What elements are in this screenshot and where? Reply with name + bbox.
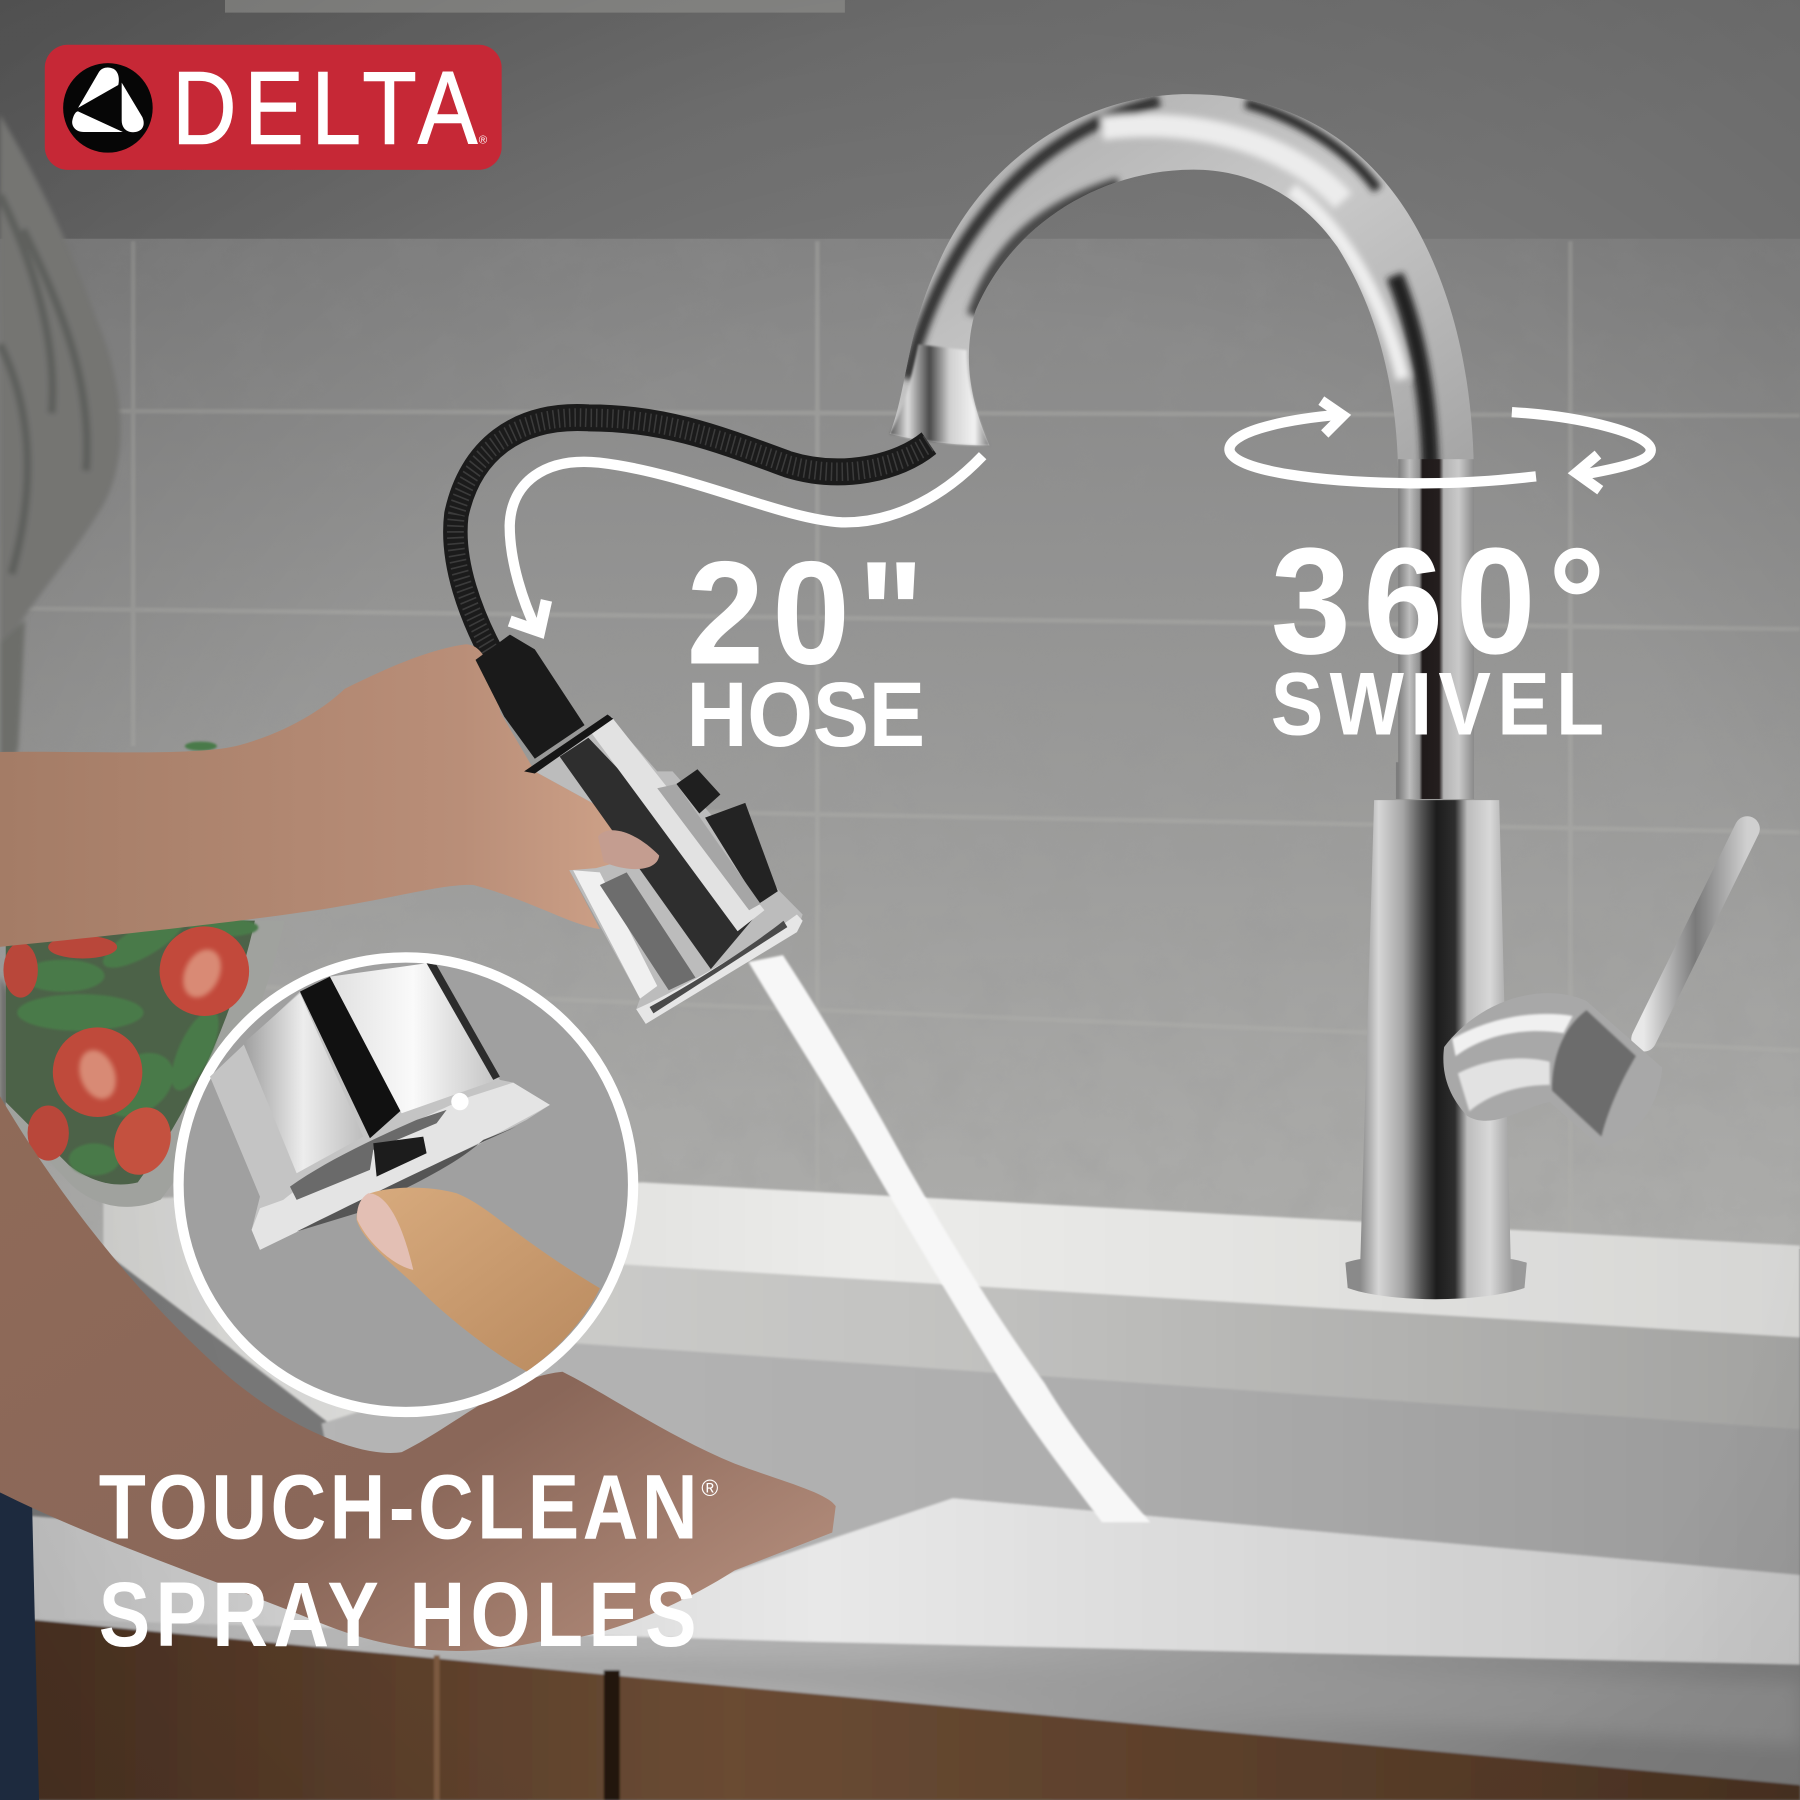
text: 20 inch hose xyxy=(686,531,925,766)
spray face xyxy=(297,1127,517,1232)
sprayer body xyxy=(524,715,803,1024)
strawberries xyxy=(3,926,249,1183)
salad bowl xyxy=(3,742,285,1207)
spout gooseneck xyxy=(890,94,1474,482)
woman's sweater xyxy=(0,115,121,1108)
bowl glass xyxy=(6,918,285,1207)
sink basin xyxy=(321,1343,1800,1575)
handle lever xyxy=(1644,829,1747,1039)
sprayer rim xyxy=(636,914,803,1024)
Delta logo xyxy=(45,45,502,170)
resting forearm and hand xyxy=(0,1096,836,1651)
chrome dark band xyxy=(300,977,402,1138)
text: touch-clean spray holes xyxy=(99,1455,718,1666)
registered mark: ® xyxy=(479,134,488,146)
sprayer closeup cone xyxy=(210,963,550,1250)
kitchen counter and sink xyxy=(21,1182,1800,1800)
fingernail xyxy=(598,830,659,869)
pull-down hose and sprayer with hand xyxy=(0,418,929,1024)
spout vertical leg xyxy=(1398,459,1474,769)
handle hub xyxy=(1443,993,1662,1148)
faucet body xyxy=(1360,800,1511,1260)
front counter edge xyxy=(23,1607,1800,1791)
leaves xyxy=(17,742,258,1176)
handle reflections xyxy=(1452,1010,1636,1136)
sprayer top ring xyxy=(524,715,613,773)
chrome light band xyxy=(244,994,344,1174)
text: 20 inch hose: 20" xyxy=(686,531,924,695)
chrome white band xyxy=(330,963,497,1113)
water stream xyxy=(748,955,1150,1522)
fingernail xyxy=(357,1193,413,1270)
highlight glint xyxy=(451,1093,469,1110)
counter back ledge xyxy=(103,1182,1800,1435)
soft shading where the counter turns down xyxy=(344,1653,1800,1745)
finger xyxy=(357,1188,600,1372)
logo emblem xyxy=(63,63,153,153)
background: tile wall xyxy=(0,239,1800,1249)
hose connector xyxy=(476,635,585,759)
spout reflections xyxy=(907,101,1430,482)
collar xyxy=(1396,762,1474,799)
counter edge face xyxy=(344,1263,1800,1433)
holding hand back xyxy=(0,644,659,947)
logo background xyxy=(45,45,502,170)
hose arrow xyxy=(510,456,983,631)
window sill at top xyxy=(225,0,845,13)
text: 360 swivel: SWIVEL xyxy=(1271,654,1604,754)
flange ring xyxy=(252,1083,550,1250)
hose xyxy=(455,418,929,666)
jeans xyxy=(0,1492,39,1800)
front counter top xyxy=(23,1498,1800,1665)
cabinet xyxy=(21,1619,1800,1800)
text: 20 inch hose: HOSE xyxy=(686,663,925,766)
chrome thin edge xyxy=(427,963,500,1080)
text: touch-clean spray holes: TOUCH-CLEAN xyxy=(99,1455,698,1558)
text: touch-clean spray holes: ® xyxy=(701,1475,718,1501)
text: 360 swivel: 360° xyxy=(1271,517,1606,686)
swivel arrows xyxy=(1229,401,1651,490)
faucet xyxy=(890,94,1747,1299)
inset circle: touch-clean spray holes xyxy=(179,957,633,1412)
text: touch-clean spray holes: SPRAY HOLES xyxy=(99,1563,697,1666)
bowl interior xyxy=(6,921,255,1185)
sprayer buttons xyxy=(676,769,720,813)
faucet base flange xyxy=(1345,1254,1527,1299)
background: upper wall band xyxy=(0,0,1800,243)
logo wordmark: DELTA xyxy=(172,51,478,166)
spout tip xyxy=(890,344,990,445)
